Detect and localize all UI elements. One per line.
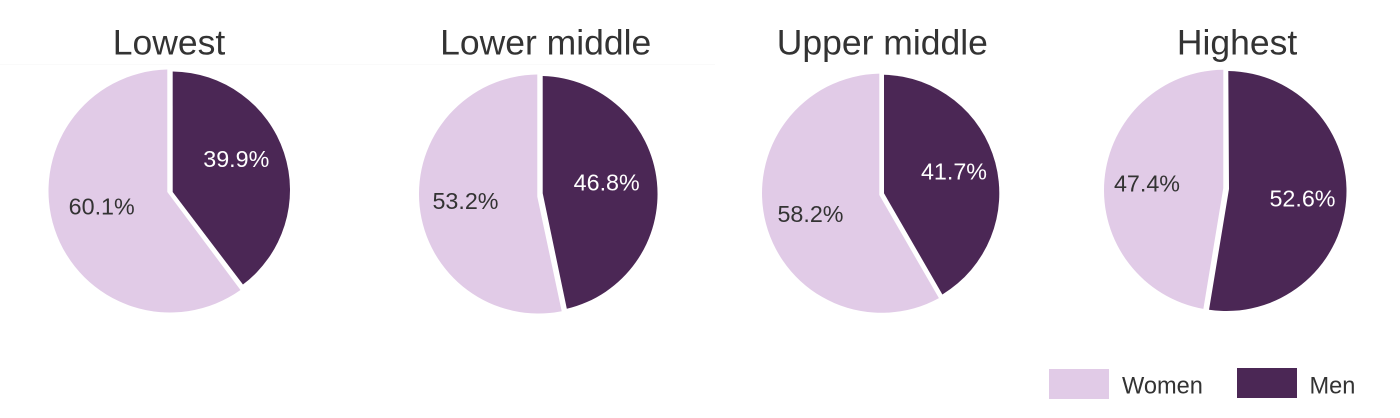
pie: Lowest: 60.1% (69, 193, 135, 219)
heading: Lowest: Lowest (113, 22, 225, 62)
pie: Upper middle: 41.7% (921, 158, 987, 184)
pie: Upper middle: 58.2% (777, 201, 844, 227)
pie: Upper middle (762, 74, 999, 313)
pie: Lower middle: 46.8% (574, 170, 640, 196)
pie: Highest: 52.6% (1269, 186, 1336, 212)
panel: Lower middle (419, 22, 658, 314)
pie: Lowest (49, 70, 290, 312)
panel: Highest (1104, 22, 1346, 311)
heading: Upper middle: Upper middle (777, 22, 988, 62)
legend (1049, 368, 1355, 399)
pie: Highest: 47.4% (1114, 171, 1180, 197)
pie: Lower middle: 53.2% (432, 188, 499, 214)
pie: Lower middle (419, 75, 658, 314)
heading: Lower middle: Lower middle (440, 22, 651, 62)
pie: Highest (1104, 70, 1346, 311)
legend item: Women (1049, 369, 1203, 399)
legend item: Men: Men (1310, 373, 1355, 399)
legend item: Women: Women (1122, 373, 1203, 399)
panel: Lowest (49, 22, 290, 312)
heading: Highest: Highest (1177, 22, 1297, 62)
panel: Upper middle (762, 22, 999, 313)
pie: Lowest: 39.9% (203, 146, 269, 172)
legend item: Men (1237, 368, 1355, 399)
